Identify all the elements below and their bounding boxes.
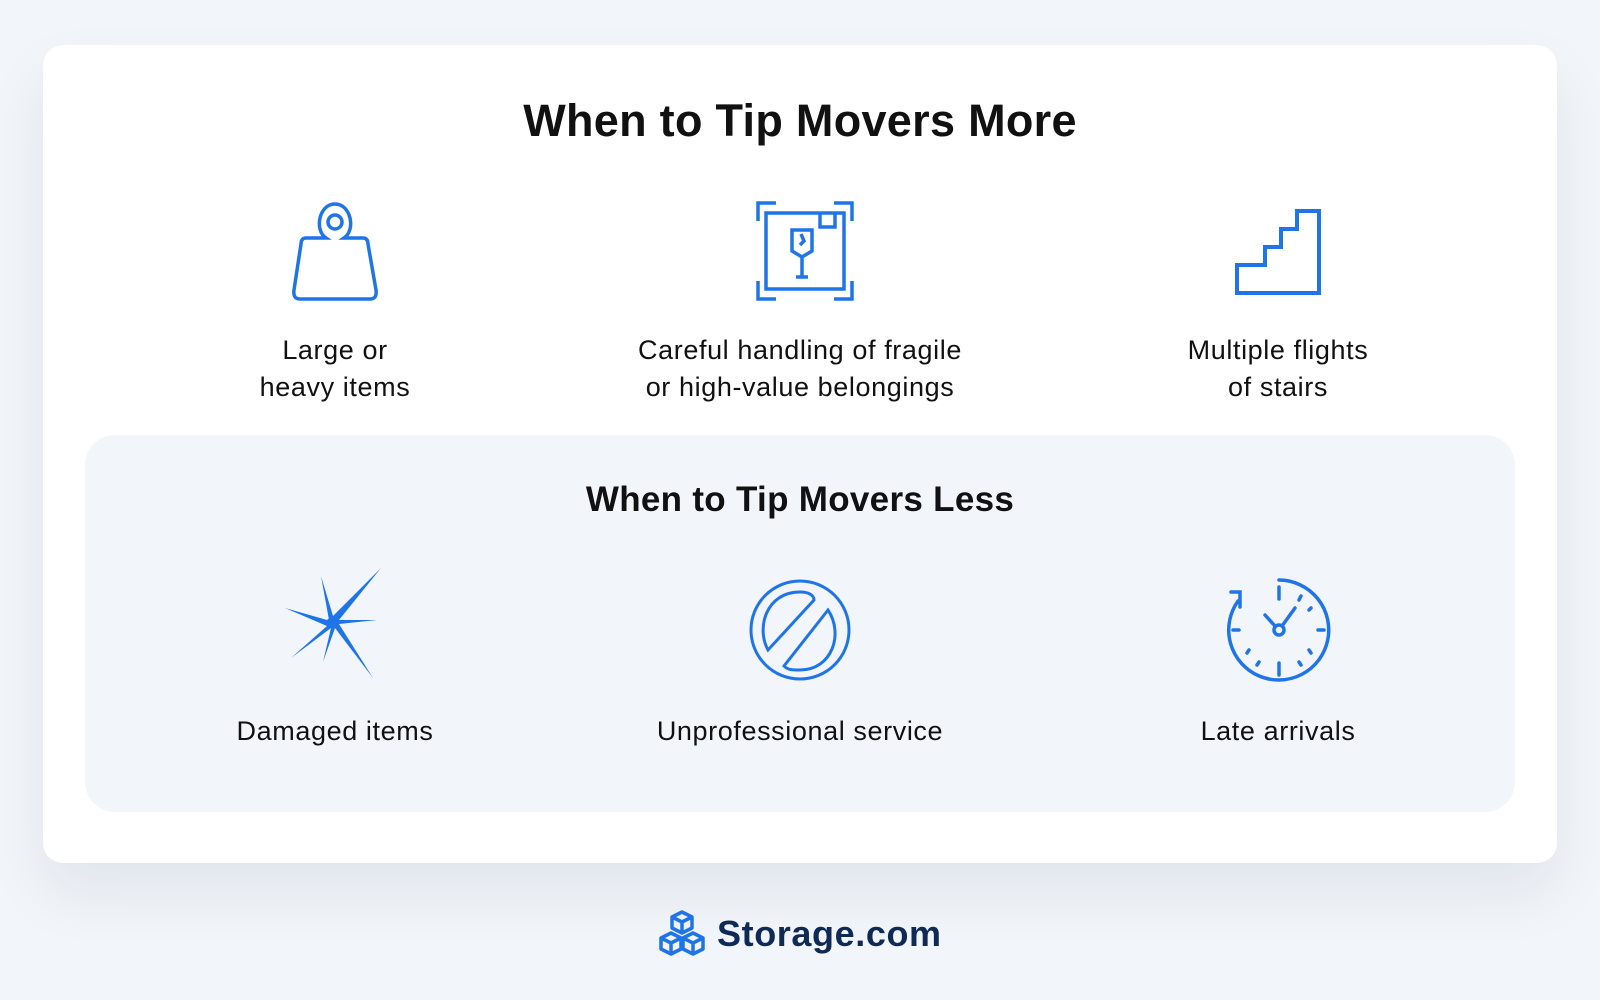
text: careful handling	[638, 335, 962, 402]
text: large or heavy items: Large or	[282, 335, 388, 365]
icon: stairs	[1235, 209, 1321, 295]
icon: clock	[1226, 578, 1330, 682]
text: unprofessional service: Unprofessional service	[657, 716, 943, 746]
text: multiple flights	[1188, 335, 1368, 402]
text: large or heavy items: heavy items	[260, 372, 410, 402]
text: large or heavy items	[260, 335, 410, 402]
icon: weight	[292, 202, 378, 301]
text: multiple flights: Multiple flights	[1188, 335, 1368, 365]
logo	[659, 910, 942, 956]
icon: fragile box	[756, 201, 854, 301]
text: damaged items: Damaged items	[237, 716, 433, 746]
icon: prohibited	[750, 580, 850, 680]
text: multiple flights: of stairs	[1228, 372, 1328, 402]
icon: crack	[285, 568, 381, 678]
subtitle: When to Tip Movers Less	[586, 480, 1014, 519]
panel: main card	[43, 45, 1557, 863]
text: Storage.com: Storage.com	[717, 913, 942, 954]
panel: tip less	[85, 435, 1515, 812]
title: When to Tip Movers More	[523, 95, 1077, 146]
text: careful handling: Careful handling of fragile	[638, 335, 962, 365]
text: late arrivals: Late arrivals	[1201, 716, 1355, 746]
text: careful handling: or high-value belongings	[646, 372, 954, 402]
icon: cubes	[659, 910, 705, 956]
